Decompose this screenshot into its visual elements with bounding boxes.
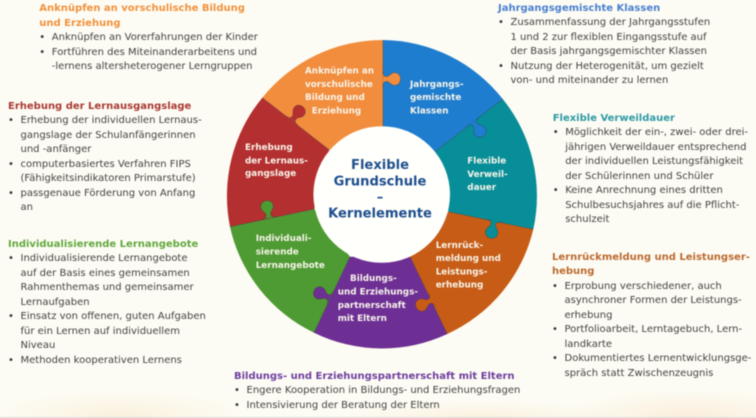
text block: Lernrückmeldung und Leistungserhebung: Erprobung verschiedener, auch: [564, 280, 722, 292]
text block: Anknüpfen an vorschulische Bildung und Erziehung: Anknüpfen an vorschulische Bildung: [39, 3, 245, 14]
text block: Anknüpfen an vorschulische Bildung und Erziehung: Anknüpfen an Vorerfahrungen der Kinder: [52, 32, 258, 43]
segment: Erhebung der Lernausgangslage: [227, 98, 329, 227]
segment: Lernrückmeldung und Leistungserhebung: meldung und: [436, 254, 501, 264]
segment: Lernrückmeldung und Leistungserhebung: Leistungs-: [436, 268, 488, 278]
text block: Individualisierende Lernangebote: Niveau: [20, 340, 55, 351]
text block: Erhebung der Lernausgangslage: (Fähigkeitsindikatoren Primarstufe): [20, 173, 196, 184]
text block: Individualisierende Lernangebote: Individualisierende Lernangebote: [8, 239, 198, 250]
text block: Individualisierende Lernangebote: für ein Lernen auf individuellem: [20, 326, 180, 337]
text block: Lernrückmeldung und Leistungserhebung: spräch statt Zwischenzeugnis: [564, 368, 713, 378]
text block: Lernrückmeldung und Leistungserhebung: [552, 252, 752, 379]
center circle title: Kernelemente: [328, 206, 432, 221]
puzzle tab: teal into brown: [483, 220, 501, 240]
puzzle tab: brown into purple: [413, 293, 435, 314]
text block: Jahrgangsgemischte Klassen: von- und miteinander zu lernen: [510, 75, 668, 86]
segment: Anknüpfen an vorschulische Bildung und Erziehung: Bildung und: [305, 93, 365, 103]
segment: Bildungs- und Erziehungspartnerschaft mit Eltern: mit Eltern: [338, 314, 387, 324]
segment: Erhebung der Lernausgangslage: der Lernaus-: [245, 156, 308, 166]
text block: Erhebung der Lernausgangslage: passgenaue Förderung von Anfang: [20, 188, 195, 198]
text block: Individualisierende Lernangebote: Methoden kooperativen Lernens: [20, 355, 182, 366]
text block: Flexible Verweildauer: Flexible Verweildauer: [553, 113, 675, 124]
text block: Lernrückmeldung und Leistungserhebung: Dokumentiertes Lernentwicklungsge-: [564, 353, 751, 364]
segment: Individualisierende Lernangebote: Lernangebote: [256, 261, 325, 271]
text block: Flexible Verweildauer: Keine Anrechnung eines dritten: [565, 185, 723, 196]
text block: Individualisierende Lernangebote: Rahmenthemas und gemeinsamer: [20, 282, 194, 293]
text block: Erhebung der Lernausgangslage: gangslage der Schulanfängerinnen: [20, 130, 196, 140]
segment: Erhebung der Lernausgangslage: Erhebung: [245, 143, 293, 153]
text block: Erhebung der Lernausgangslage: an: [20, 202, 33, 213]
segment: Lernrückmeldung und Leistungserhebung: erhebung: [436, 280, 483, 290]
segment: Bildungs- und Erziehungspartnerschaft mit Eltern: Bildungs-: [350, 274, 397, 284]
text block: Lernrückmeldung und Leistungserhebung: Lernrückmeldung und Leistungser-: [552, 252, 750, 262]
puzzle tab: orange into blue: [383, 72, 400, 86]
puzzle tab: green into red: [259, 199, 276, 219]
text block: Anknüpfen an vorschulische Bildung und Erziehung: [38, 2, 258, 72]
puzzle tab: purple into green: [311, 284, 333, 305]
text block: Flexible Verweildauer: der individuellen Leistungsfähigkeit: [565, 156, 743, 167]
text block: Bildungs- und Erziehungspartnerschaft mit Eltern: [234, 370, 520, 411]
segment: Anknüpfen an vorschulische Bildung und Erziehung: Erziehung: [312, 106, 361, 116]
text block: Jahrgangsgemischte Klassen: [496, 2, 710, 86]
segment: Bildungs- und Erziehungspartnerschaft mit Eltern: und Erziehungs-: [338, 288, 418, 298]
segment: Individualisierende Lernangebote: [230, 209, 350, 333]
segment: Anknüpfen an vorschulische Bildung und Erziehung: Anknüpfen an: [305, 66, 374, 76]
text block: Jahrgangsgemischte Klassen: Zusammenfassung der Jahrgangsstufen: [510, 17, 710, 28]
text block: Individualisierende Lernangebote: Lernaufgaben: [20, 297, 90, 308]
text block: Flexible Verweildauer: Möglichkeit der ein-, zwei- oder drei-: [565, 127, 748, 138]
text block: Erhebung der Lernausgangslage: computerbasiertes Verfahren FIPS: [20, 158, 191, 170]
segment: Flexible Verweildauer: Flexible: [467, 156, 506, 166]
text block: Individualisierende Lernangebote: Individualisierende Lernangebote: [20, 253, 188, 264]
text block: Erhebung der Lernausgangslage: Erhebung der individuellen Lernaus-: [20, 115, 202, 126]
segment: Flexible Verweildauer: dauer: [467, 183, 497, 193]
text block: Jahrgangsgemischte Klassen: Nutzung der Heterogenität, um gezielt: [510, 61, 704, 72]
segment: Bildungs- und Erziehungspartnerschaft mit Eltern: [314, 257, 447, 348]
segment: Jahrgangsgemischte Klassen: Jahrgangs-: [409, 80, 464, 90]
segment: Jahrgangsgemischte Klassen: gemischte: [410, 93, 461, 103]
segment: Lernrückmeldung und Leistungserhebung: Lernrück-: [436, 241, 484, 251]
puzzle tab: red into orange: [286, 102, 309, 125]
text block: Bildungs- und Erziehungspartnerschaft mit Eltern: Engere Kooperation in Bildungs- und Erziehungsfragen: [246, 385, 520, 396]
text block: Erhebung der Lernausgangslage: Erhebung der Lernausgangslage: [8, 100, 191, 112]
text block: Erhebung der Lernausgangslage: [8, 100, 202, 213]
segment: Anknüpfen an vorschulische Bildung und Erziehung: vorschulische: [305, 80, 373, 90]
text block: Flexible Verweildauer: [552, 112, 748, 225]
segment: Individualisierende Lernangebote: Individuali-: [256, 234, 312, 244]
segment: Lernrückmeldung und Leistungserhebung: [410, 212, 533, 334]
text block: Individualisierende Lernangebote: [8, 238, 206, 366]
text block: Erhebung der Lernausgangslage: und -anfänger: [20, 144, 91, 155]
text block: Flexible Verweildauer: Schulbesuchsjahres auf die Pflicht-: [565, 200, 739, 211]
text block: Anknüpfen an vorschulische Bildung und Erziehung: und Erziehung: [39, 18, 120, 28]
segment: Bildungs- und Erziehungspartnerschaft mit Eltern: partnerschaft: [338, 301, 406, 311]
text block: Jahrgangsgemischte Klassen: der Basis jahrgangsgemischter Klassen: [510, 46, 707, 57]
text block: Individualisierende Lernangebote: auf der Basis eines gemeinsamen: [20, 268, 190, 279]
text block: Lernrückmeldung und Leistungserhebung: hebung: [552, 266, 594, 277]
puzzle tab: blue into teal: [467, 117, 490, 140]
segment: Jahrgangsgemischte Klassen: [383, 40, 503, 152]
text block: Lernrückmeldung und Leistungserhebung: asynchroner Formen der Leistungs-: [564, 295, 742, 306]
center circle title: [313, 126, 450, 263]
text block: Flexible Verweildauer: schulzeit: [565, 214, 609, 225]
text block: Lernrückmeldung und Leistungserhebung: erhebung: [564, 310, 612, 320]
text block: Lernrückmeldung und Leistungserhebung: Portfolioarbeit, Lerntagebuch, Lern-: [564, 324, 742, 335]
center circle title: Flexible: [351, 158, 409, 173]
segment: Individualisierende Lernangebote: sierende: [256, 248, 299, 258]
text block: Lernrückmeldung und Leistungserhebung: landkarte: [564, 338, 612, 350]
segment: Jahrgangsgemischte Klassen: Klassen: [410, 106, 448, 116]
text block: Flexible Verweildauer: der Schülerinnen und Schüler: [565, 171, 713, 182]
segment: Anknüpfen an vorschulische Bildung und Erziehung: [262, 40, 383, 150]
text block: Bildungs- und Erziehungspartnerschaft mit Eltern: Bildungs- und Erziehungspartnerschaft mit Eltern: [234, 370, 515, 382]
text block: Jahrgangsgemischte Klassen: 1 und 2 zur flexiblen Eingangsstufe auf: [510, 32, 707, 43]
text block: Individualisierende Lernangebote: Einsatz von offenen, guten Aufgaben: [20, 311, 206, 322]
text block: Flexible Verweildauer: jährigen Verweildauer entsprechend: [565, 142, 746, 153]
text block: Jahrgangsgemischte Klassen: Jahrgangsgemischte Klassen: [498, 3, 660, 14]
text block: Bildungs- und Erziehungspartnerschaft mit Eltern: Intensivierung der Beratung der Eltern: [246, 400, 440, 410]
text block: Anknüpfen an vorschulische Bildung und Erziehung: Fortführen des Miteinanderarbeitens und: [52, 46, 257, 58]
segment: Erhebung der Lernausgangslage: gangslage: [245, 169, 296, 179]
segment: Flexible Verweildauer: [435, 99, 537, 229]
text block: Anknüpfen an vorschulische Bildung und Erziehung: -lernens altersheterogener Lerngruppen: [52, 61, 252, 72]
center circle title: –: [377, 190, 383, 205]
segment: Flexible Verweildauer: Verweil-: [467, 170, 508, 180]
center circle title: Grundschule: [334, 174, 427, 189]
